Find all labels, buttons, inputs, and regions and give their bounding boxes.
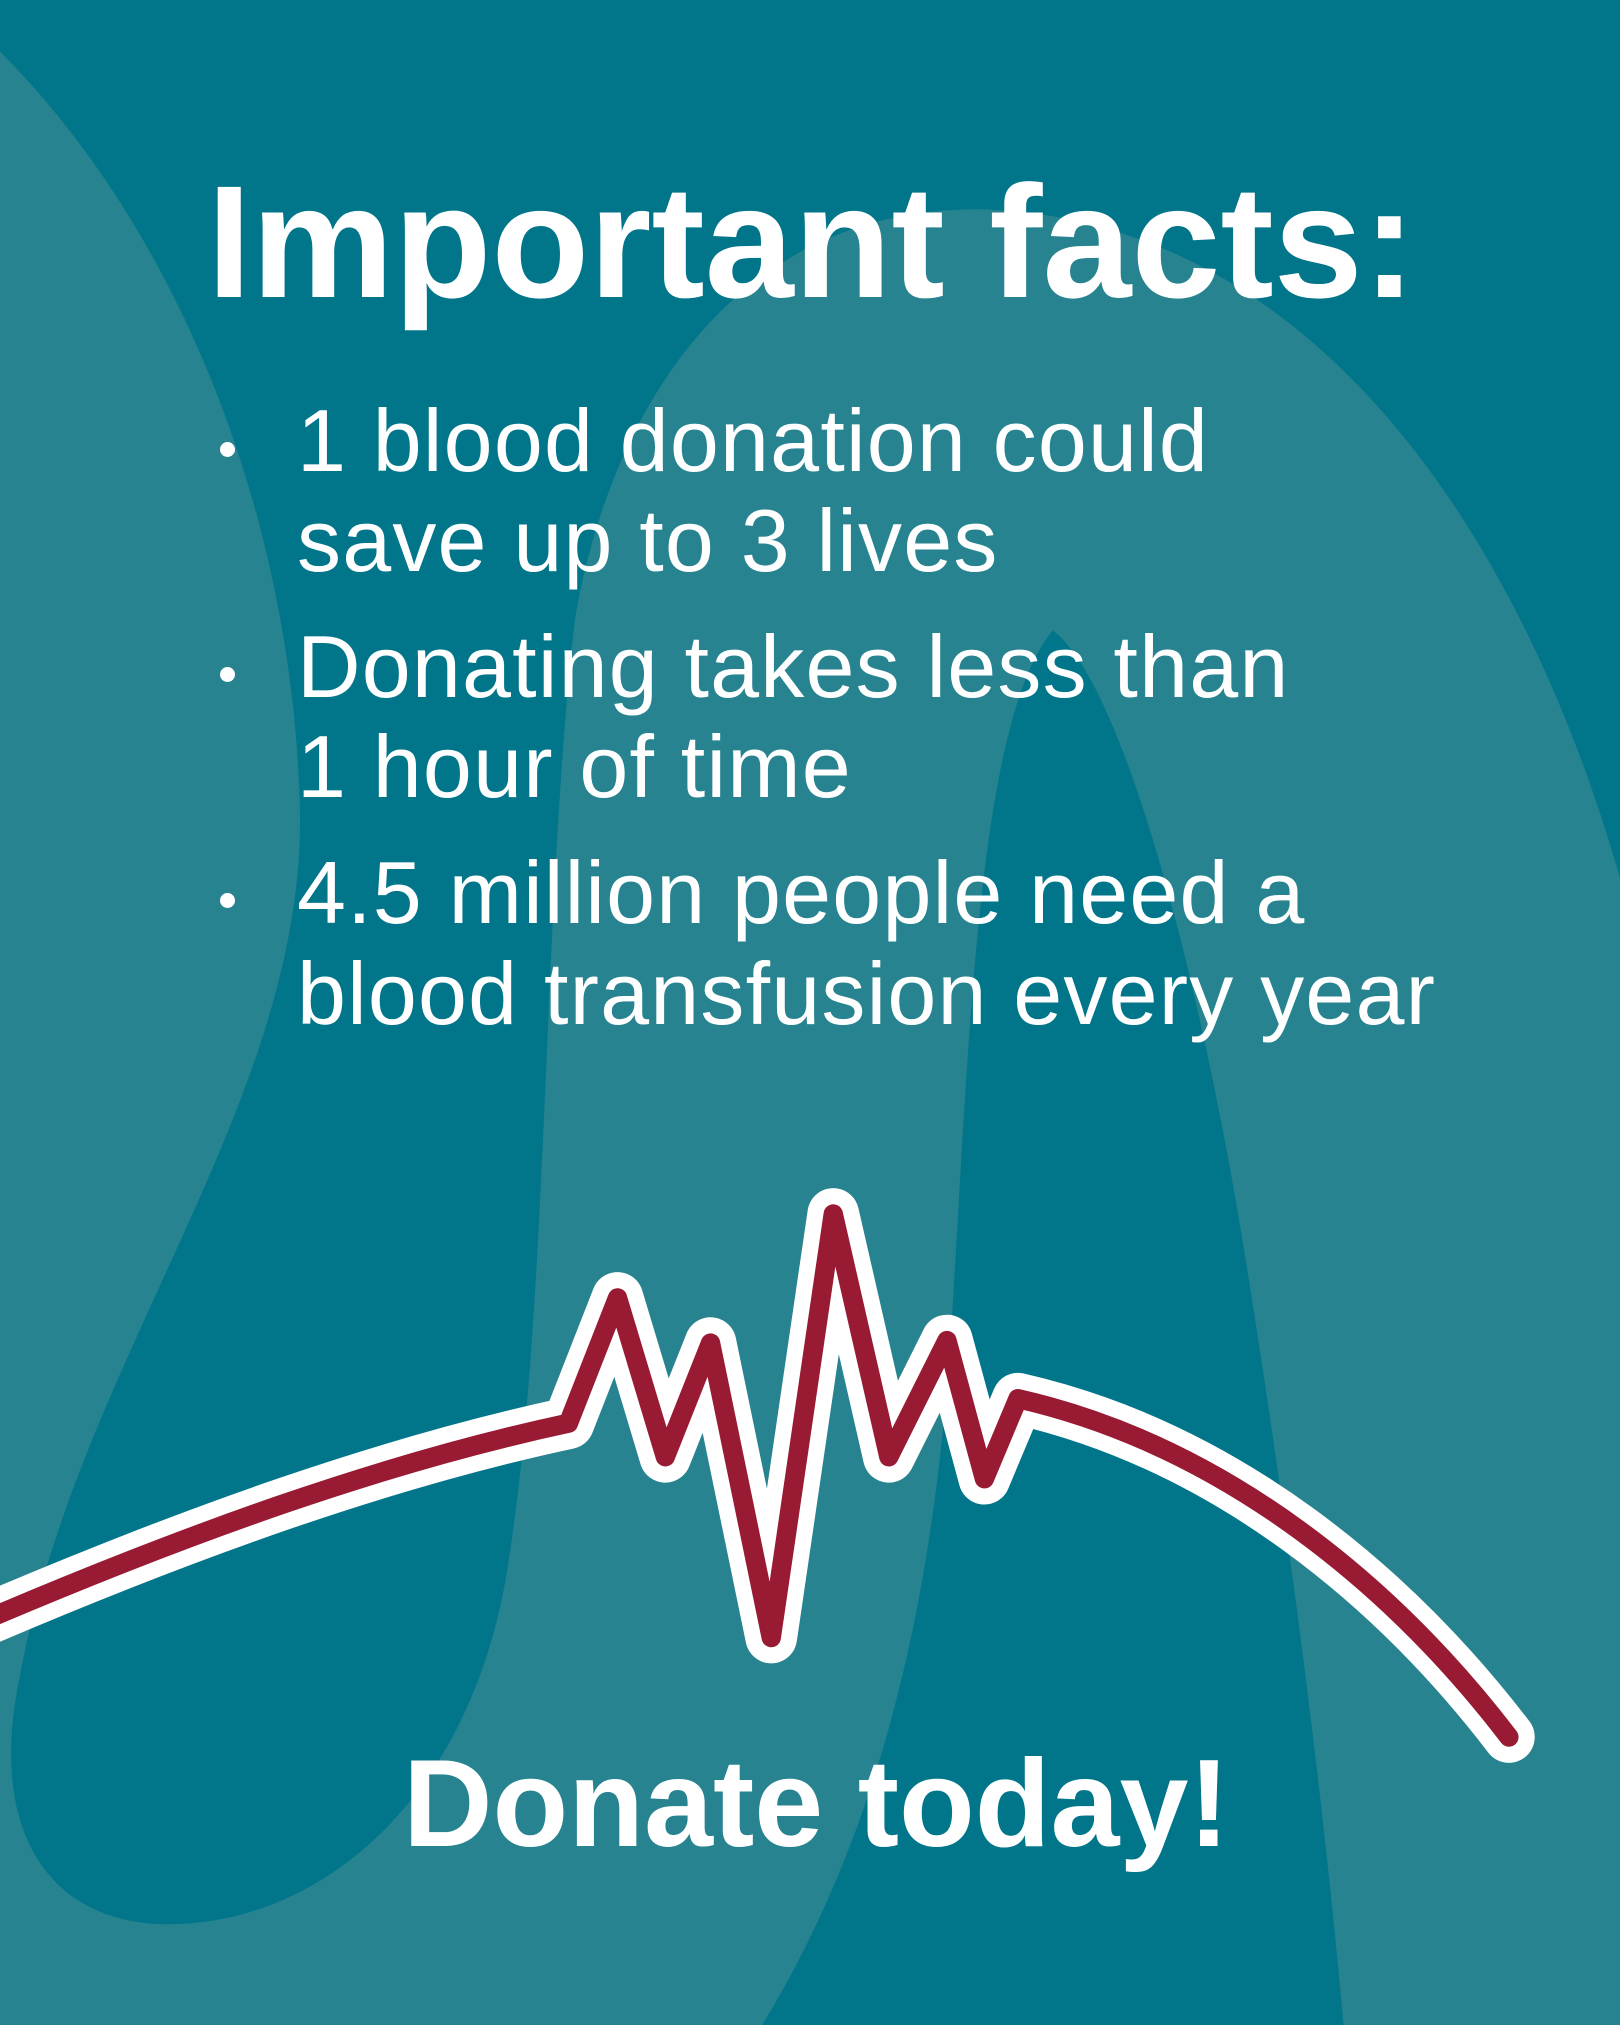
title: Important facts: <box>207 152 1416 331</box>
call to action: Donate today! <box>403 1735 1230 1873</box>
bullet list: 4.5 million people need a <box>297 843 1305 942</box>
bullet 1 <box>220 391 1209 590</box>
bullet list: save up to 3 lives <box>297 491 999 590</box>
bullet 2 <box>220 617 1290 816</box>
bullet list: 1 blood donation could <box>297 391 1209 490</box>
bullet list: 1 hour of time <box>297 717 852 816</box>
bullet list <box>220 391 1436 1043</box>
bullet 3 <box>220 843 1436 1043</box>
bullet list: Donating takes less than <box>297 617 1290 716</box>
bullet list: blood transfusion every year <box>297 944 1436 1043</box>
